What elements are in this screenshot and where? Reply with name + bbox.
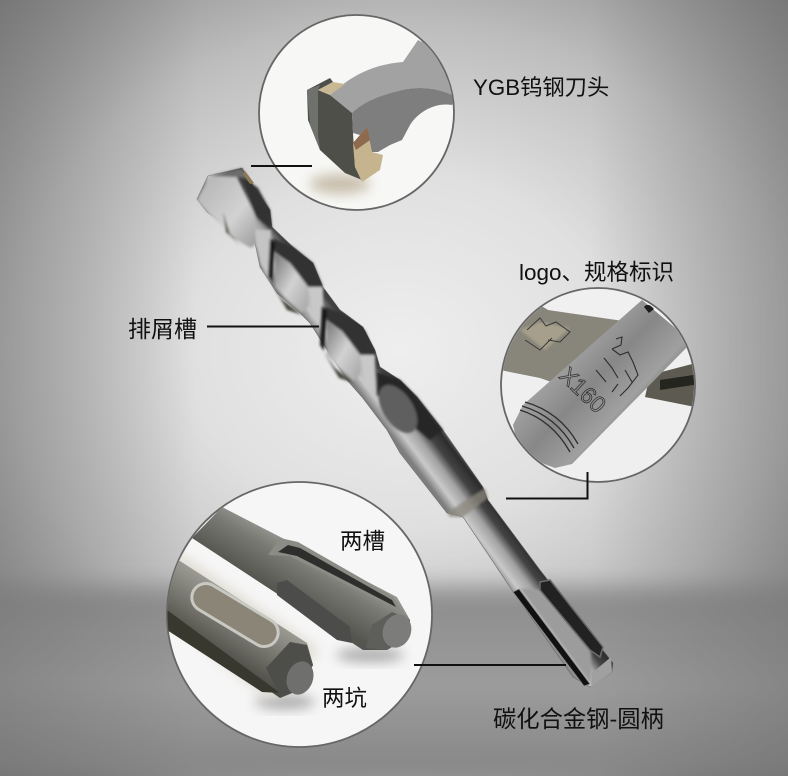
dimple	[190, 582, 280, 648]
slot end	[644, 305, 654, 313]
circle: logo and size marking detail	[500, 288, 700, 482]
lower groove	[167, 610, 280, 693]
leader line: head	[251, 165, 312, 167]
leader line: shank	[414, 664, 566, 666]
end cap	[266, 642, 313, 696]
label: two dimples: 两坑	[322, 686, 367, 711]
brazing	[318, 82, 345, 95]
label: chip flute: 排屑槽	[128, 316, 197, 342]
rear bit marking	[525, 318, 570, 350]
two-dimple bit	[167, 560, 318, 698]
leader line: flute	[207, 326, 319, 328]
shank slots	[513, 580, 612, 687]
main shank	[513, 300, 692, 468]
shank upper surface	[330, 40, 456, 113]
two-groove bit	[192, 507, 416, 652]
collar rings	[520, 402, 578, 452]
label: carbide steel round shank: 碳化合金钢-圆柄	[493, 706, 664, 732]
label: two grooves: 两槽	[340, 529, 385, 554]
circle: shank types detail	[167, 482, 432, 747]
leader line: logo	[506, 472, 588, 498]
size marking: X160	[555, 362, 611, 418]
flute run-out	[371, 372, 443, 440]
end cap	[366, 612, 410, 650]
circle: carbide head detail	[259, 15, 456, 210]
open groove	[268, 538, 397, 604]
shank lower surface	[352, 88, 456, 152]
label: logo and spec mark: logo、规格标识	[519, 260, 674, 285]
drill body	[197, 168, 613, 687]
logo marking	[596, 337, 638, 396]
shank collar	[447, 488, 488, 517]
rear bit	[503, 306, 619, 382]
closed groove	[277, 580, 352, 643]
flute section one	[255, 230, 323, 325]
drill tip	[197, 168, 272, 248]
carbide tip	[307, 78, 362, 180]
right rear shank	[645, 364, 694, 406]
label: YGB carbide head: YGB钨钢刀头	[473, 75, 609, 100]
drill bit	[197, 168, 613, 687]
flute section two	[320, 306, 375, 393]
